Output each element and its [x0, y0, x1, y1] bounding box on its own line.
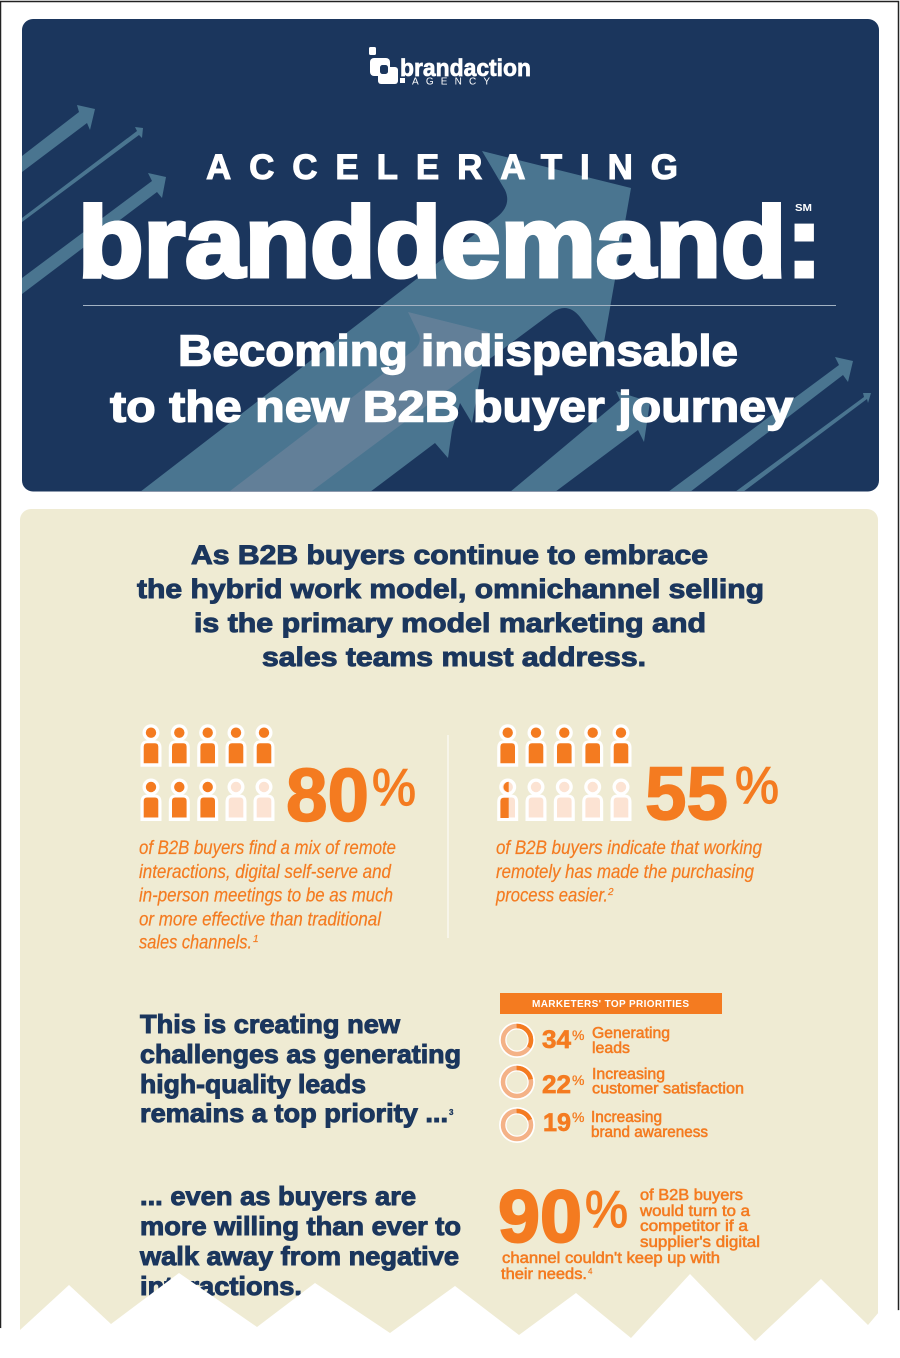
text: 80 percent description: 1 — [253, 934, 259, 945]
text: 80 percent description: in-person meetings to be as much — [139, 886, 393, 906]
service mark: SM — [795, 202, 812, 214]
text: walk away: more willing than ever to — [140, 1211, 461, 1241]
text: walk away: walk away from negative — [139, 1241, 459, 1271]
text: 55 percent description: of B2B buyers indicate that working — [496, 838, 762, 859]
priority: 19 percent — [499, 1107, 708, 1143]
heading: brand demand: branddemand: — [78, 186, 822, 298]
logo: brandaction — [400, 55, 531, 82]
intro text: As B2B buyers continue to embrace — [191, 540, 708, 570]
text: walk away: interactions. — [140, 1271, 302, 1301]
stat: 80 percent: % — [372, 759, 416, 817]
text: 80 percent description: or more effective than traditional — [139, 910, 382, 930]
stat: 80 percent: 80 — [286, 753, 369, 837]
banner: marketers top priorities: MARKETERS' TOP PRIORITIES — [532, 999, 689, 1010]
priority: 22 percent — [499, 1064, 744, 1100]
text: new challenges: challenges as generating — [140, 1039, 461, 1069]
priority: 34 percent: leads — [592, 1040, 630, 1057]
text: new challenges — [140, 1009, 461, 1128]
stat: 90 percent: 90 — [498, 1175, 582, 1258]
text: 55 percent description: remotely has made the purchasing — [496, 862, 754, 883]
text: 80 percent description: of B2B buyers find a mix of remote — [139, 838, 396, 859]
text: new challenges: 3 — [449, 1108, 454, 1117]
subtitle: Becoming indispensable — [178, 326, 738, 376]
text: 55 percent description: 2 — [607, 887, 614, 898]
heading: accelerating: ACCELERATING — [206, 148, 678, 187]
banner: marketers top priorities — [500, 993, 722, 1014]
priority: 19 percent: Increasing — [591, 1109, 662, 1126]
logo — [369, 47, 531, 88]
text: 90 percent description: supplier's digital — [640, 1234, 760, 1251]
text: new challenges: This is creating new — [140, 1009, 401, 1039]
people pictogram 80 percent — [140, 724, 274, 821]
priority: 19 percent: % — [572, 1109, 584, 1125]
stat: 90 percent — [498, 1175, 628, 1258]
subtitle: to the new B2B buyer journey — [110, 382, 794, 432]
intro text — [137, 540, 764, 672]
panel: header — [22, 19, 879, 492]
text: walk away — [139, 1181, 461, 1301]
people pictogram 55 percent — [497, 724, 632, 821]
intro text: is the primary model marketing and — [194, 608, 706, 638]
text: 55 percent description: process easier. — [495, 886, 608, 906]
priority: 19 percent: brand awareness — [591, 1124, 708, 1141]
arrows background — [22, 105, 871, 492]
priority: 22 percent: customer satisfaction — [592, 1080, 744, 1098]
text: 90 percent description: channel couldn't keep up with — [502, 1250, 720, 1267]
text: 90 percent description: would turn to a — [639, 1203, 750, 1220]
text: 90 percent description — [501, 1187, 760, 1283]
priority: 34 percent: 34 — [542, 1026, 571, 1054]
priority: 34 percent — [499, 1022, 670, 1058]
stat: 55 percent: % — [735, 757, 779, 815]
text: walk away: ... even as buyers are — [140, 1181, 416, 1211]
priority: 22 percent: Increasing — [592, 1066, 665, 1083]
priority: 22 percent: 22 — [542, 1071, 571, 1099]
text: 90 percent description: 4 — [588, 1267, 593, 1276]
text: 80 percent description — [139, 838, 396, 954]
stat: 90 percent: % — [585, 1181, 628, 1239]
text: new challenges: remains a top priority ... — [140, 1098, 448, 1128]
priority: 34 percent: Generating — [592, 1025, 670, 1042]
stat: 55 percent — [645, 752, 779, 836]
text: 80 percent description: sales channels. — [139, 932, 252, 954]
stat: 80 percent — [286, 753, 416, 837]
text: 55 percent description — [495, 838, 762, 906]
intro text: sales teams must address. — [262, 642, 646, 672]
text: 90 percent description: of B2B buyers — [640, 1187, 743, 1204]
subtitle — [110, 326, 794, 432]
logo: AGENCY — [412, 76, 490, 88]
intro text: the hybrid work model, omnichannel selling — [137, 574, 764, 604]
stat: 55 percent: 55 — [645, 752, 728, 836]
text: 90 percent description: competitor if a — [640, 1218, 748, 1235]
priority: 19 percent: 19 — [543, 1109, 571, 1137]
panel: cream body — [20, 509, 878, 1345]
text: 90 percent description: their needs. — [501, 1266, 587, 1283]
text: new challenges: high-quality leads — [140, 1069, 366, 1099]
priority: 22 percent: % — [572, 1072, 584, 1088]
text: 80 percent description: interactions, digital self-serve and — [139, 862, 392, 883]
priority: 34 percent: % — [572, 1027, 584, 1043]
